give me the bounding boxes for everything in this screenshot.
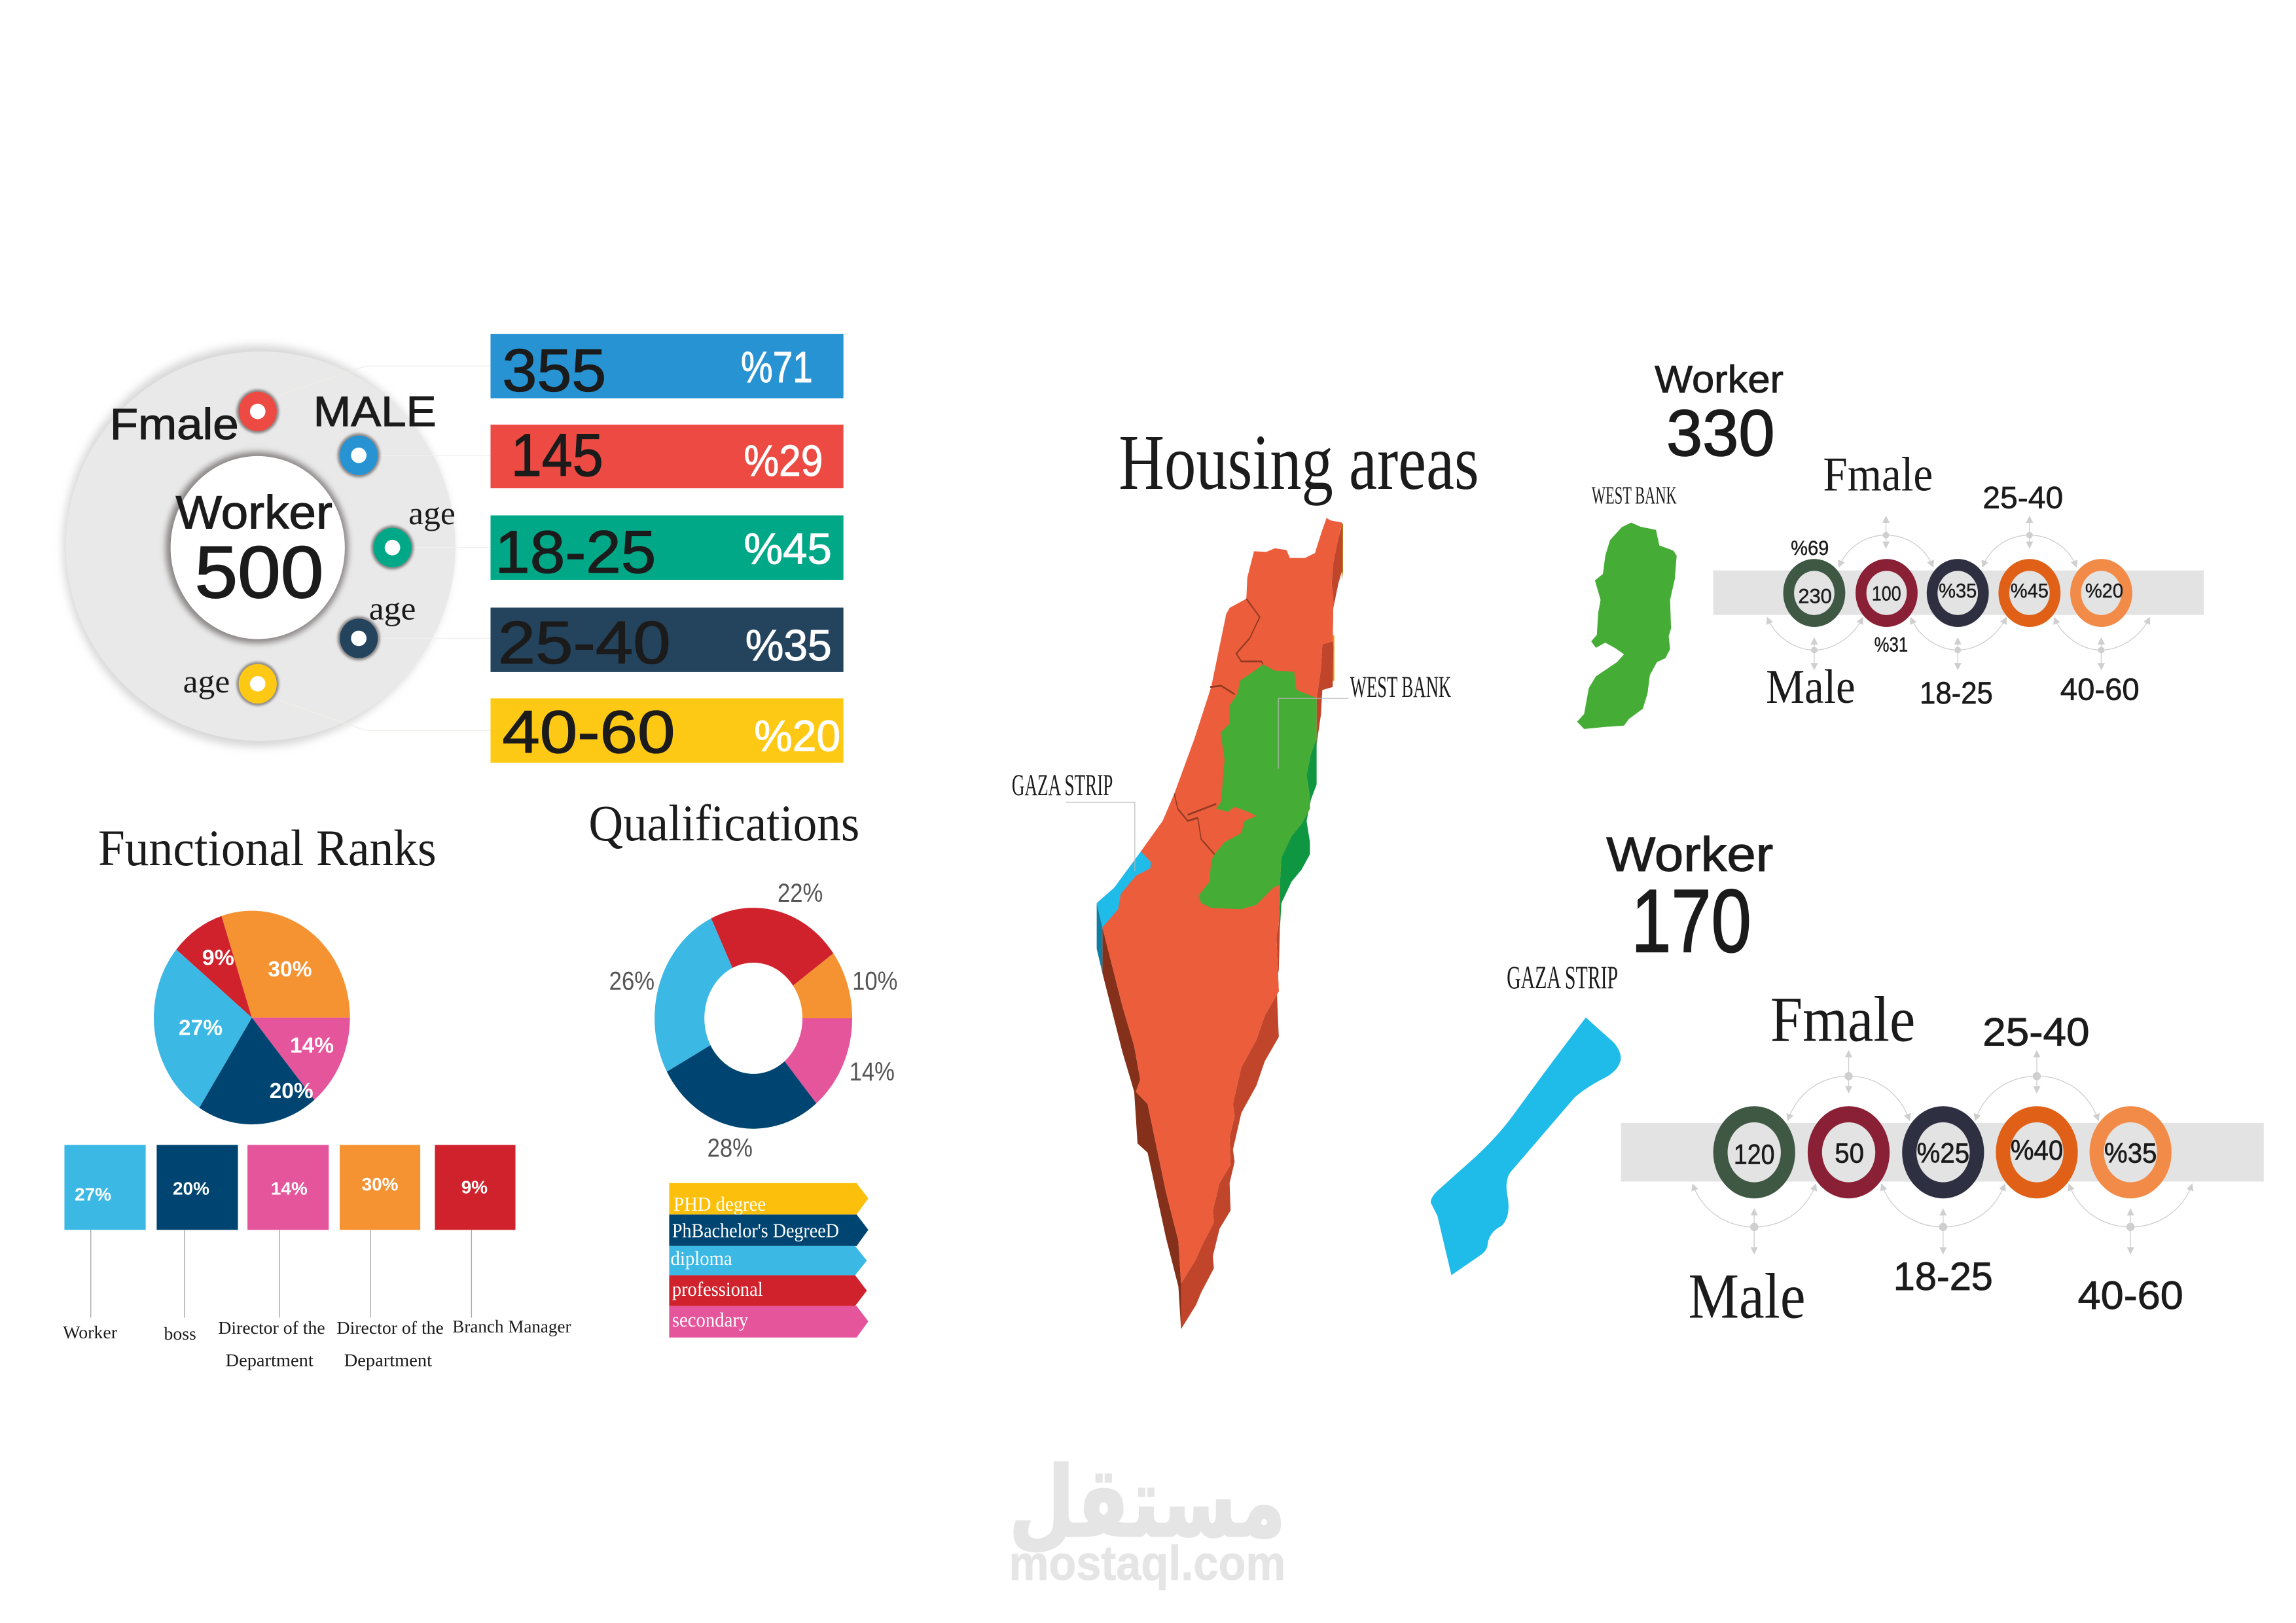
label: age bottom: age (183, 664, 230, 700)
pie chart: functional ranks: 27% (179, 1016, 223, 1041)
rank card: Director 14%: 14% (271, 1179, 308, 1199)
dot: age 18-25 (371, 526, 414, 569)
leader line: West Bank (1278, 698, 1349, 769)
watermark: mostaql logo (1009, 1446, 1285, 1590)
ring: %35 (1927, 559, 1989, 627)
rank label: boss: boss (164, 1324, 196, 1344)
ring: 50: 50 (1835, 1138, 1864, 1169)
legend arrow: secondary (669, 1306, 869, 1338)
label: Fmale: Fmale (1770, 984, 1915, 1056)
watermark: mostaql logo: mostaql.com (1009, 1536, 1285, 1590)
ring: %35: %35 (1939, 580, 1977, 602)
dot: age 40-60 (236, 662, 279, 705)
map: West Bank (1577, 523, 1677, 729)
ring: %20 (2070, 559, 2132, 627)
legend arrow: Bachelor: PhBachelor's DegreeD (672, 1219, 839, 1241)
rank card: boss: 20% (173, 1179, 209, 1199)
heading: Housing areas: Housing areas (1119, 419, 1479, 507)
watermark: mostaql logo: مستقل (1009, 1446, 1285, 1559)
label: 18-25: 18-25 (1893, 1254, 1993, 1298)
dot: female (236, 389, 279, 433)
ring: %40 (1996, 1106, 2078, 1198)
bar: 18-25 (490, 516, 844, 586)
ring: %25: %25 (1917, 1138, 1969, 1169)
outer disc (63, 346, 456, 747)
rank label: Worker: Worker (63, 1323, 118, 1343)
label: MALE: MALE (314, 387, 437, 435)
centre circle (166, 452, 348, 643)
pie chart: functional ranks: 14% (290, 1034, 334, 1058)
connectors (1767, 517, 2149, 669)
label: WEST BANK on map: WEST BANK (1350, 670, 1451, 704)
ring: %45: %45 (2011, 580, 2049, 602)
bar: 145 (490, 422, 844, 489)
ring: %20: %20 (2085, 580, 2123, 602)
bar: 25-40 (490, 607, 844, 676)
label: age right: age (408, 495, 456, 531)
bar: 18-25: %45 (744, 524, 832, 573)
heading: Worker Gaza: Worker (1606, 827, 1773, 882)
label: Worker: Worker (175, 487, 332, 539)
rank label: Director of the Department: Director of the (218, 1318, 325, 1338)
rank label: Director of the Department (218, 1318, 325, 1370)
heading: Functional Ranks: Functional Ranks (98, 819, 437, 876)
rank label: Director of the Department second: Department (344, 1350, 432, 1370)
pie chart: functional ranks: 20% (270, 1079, 314, 1103)
legend arrow: Bachelor (669, 1215, 869, 1246)
bar: 145: 145 (511, 422, 603, 489)
legend arrow: PHD degree: PHD degree (673, 1193, 766, 1215)
dot: age 25-40 (338, 616, 380, 660)
bar: 18-25: 18-25 (495, 519, 656, 586)
ring: 230: 230 (1798, 585, 1832, 608)
label: GAZA STRIP on map: GAZA STRIP (1012, 768, 1113, 802)
ring: %25 (1902, 1106, 1984, 1198)
donut chart: qualifications: 14% (850, 1057, 895, 1086)
rank label: Director of the Department: Department (226, 1350, 314, 1370)
heading: Worker West Bank: Worker (1655, 359, 1784, 401)
ring: 120 (1713, 1106, 1795, 1198)
bar: 40-60: 40-60 (502, 699, 675, 766)
ring: 100: 100 (1872, 582, 1901, 605)
bar: 355 (490, 334, 844, 404)
rank label: Director of the Department second (337, 1318, 444, 1370)
label: GAZA STRIP: GAZA STRIP (1507, 959, 1618, 995)
ring: %35: %35 (2104, 1138, 2157, 1169)
number: 500: 500 (195, 531, 323, 613)
rank card: Worker (64, 1145, 146, 1318)
panel: Gaza breakdown (1621, 984, 2264, 1332)
bar: 25-40: %35 (745, 621, 832, 670)
rank card: boss (156, 1145, 238, 1318)
rank card: Branch Manager (435, 1145, 516, 1318)
legend arrow: professional (669, 1275, 867, 1306)
ring: 100 (1856, 559, 1918, 627)
label: %69: %69 (1791, 537, 1829, 560)
donut chart: qualifications (609, 878, 897, 1162)
label: Fmale: Fmale (110, 400, 239, 449)
panel: West Bank breakdown (1713, 447, 2204, 713)
ring: 120: 120 (1734, 1140, 1775, 1171)
ring: 50 (1808, 1106, 1890, 1198)
heading: Qualifications: Qualifications (588, 794, 859, 851)
number: 170: 170 (1631, 870, 1751, 971)
pie chart: functional ranks: 9% (202, 946, 234, 970)
bar: 25-40: 25-40 (498, 609, 671, 676)
ring: %40: %40 (2011, 1135, 2063, 1166)
legend arrow: professional: professional (672, 1278, 763, 1300)
rank card: Worker: 27% (75, 1185, 111, 1205)
bar: 40-60: %20 (754, 712, 840, 761)
dot: male (338, 433, 380, 477)
bar: 355: 355 (502, 337, 606, 404)
donut chart: qualifications: 28% (708, 1133, 753, 1162)
label: Male: Male (1689, 1261, 1806, 1332)
connectors (1693, 1051, 2192, 1253)
label: %31: %31 (1874, 633, 1908, 656)
number: 330: 330 (1666, 397, 1775, 470)
map: Palestine 3D (1097, 518, 1343, 1329)
legend arrow: PHD degree (669, 1183, 869, 1215)
label: 25-40: 25-40 (1982, 1009, 2090, 1054)
bar: 145: %29 (744, 437, 823, 486)
rank card: Director 30% (340, 1145, 420, 1318)
donut chart: qualifications: 10% (852, 966, 897, 995)
rank card: Director 14% (247, 1145, 329, 1318)
label: 25-40: 25-40 (1982, 480, 2063, 514)
donut chart: qualifications: 22% (778, 878, 823, 908)
rank card: Director 30%: 30% (362, 1174, 399, 1194)
label: 18-25: 18-25 (1920, 675, 1993, 710)
ring: %35 (2090, 1106, 2172, 1198)
ring: %45 (1998, 559, 2060, 627)
bar: 40-60 (490, 698, 844, 766)
label: Fmale: Fmale (1823, 447, 1933, 501)
bar: 355: %71 (741, 343, 813, 392)
map: Gaza Strip (1431, 1018, 1621, 1275)
ring: 230 (1784, 559, 1845, 627)
leader line: Gaza (1066, 802, 1135, 871)
pie chart: functional ranks: 30% (268, 957, 312, 982)
label: 40-60: 40-60 (2060, 671, 2140, 706)
legend arrow: secondary: secondary (672, 1309, 748, 1331)
legend arrow: diploma (669, 1246, 867, 1275)
donut chart: qualifications: 26% (609, 966, 655, 995)
label: Male: Male (1766, 660, 1856, 713)
label: 40-60: 40-60 (2078, 1273, 2183, 1317)
label: WEST BANK: WEST BANK (1592, 482, 1677, 510)
rank card: Branch Manager: 9% (461, 1177, 488, 1197)
legend arrow: diploma: diploma (671, 1247, 732, 1270)
panel: worker total circle (63, 346, 490, 747)
rank label: Branch Manager: Branch Manager (452, 1317, 571, 1337)
pie chart: functional ranks (154, 911, 350, 1124)
rank label: Director of the Department second: Director of the (337, 1318, 444, 1338)
label: age lower right: age (369, 590, 416, 626)
